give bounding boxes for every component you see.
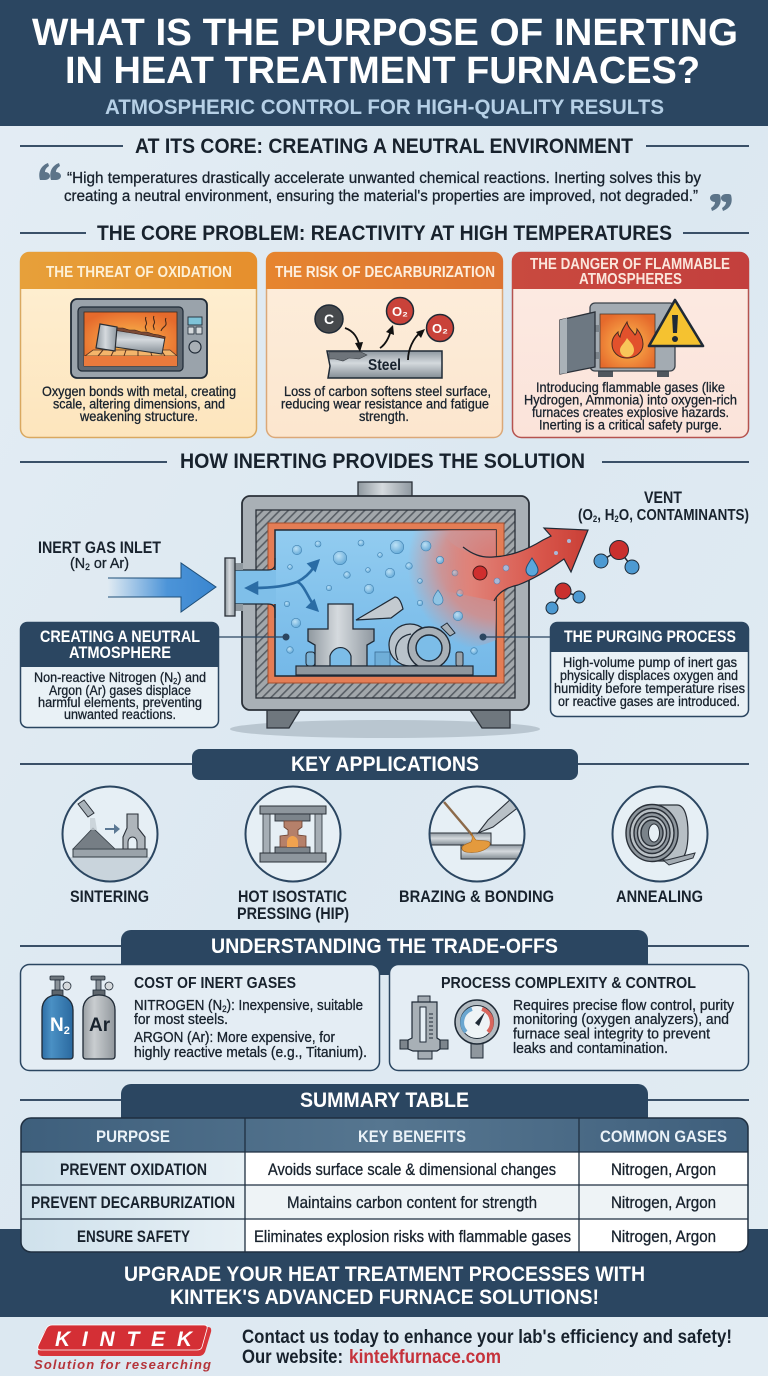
panel text	[441, 975, 735, 1057]
quote block: creating a neutral environment, ensuring the material's properties are improved, not degraded.”	[64, 188, 698, 205]
inlet label: (N	[70, 555, 86, 572]
vent label: 2	[593, 514, 597, 524]
card text: Introducing flammable gases (like	[536, 380, 725, 395]
card text: weakening structure.	[79, 409, 198, 424]
red contaminated gas cloud	[411, 530, 496, 646]
icon: powder sintering	[60, 786, 160, 887]
logo: kintek: Solution for researching	[34, 1357, 211, 1372]
icon: gas cylinders: N	[50, 1015, 64, 1036]
application: sintering	[60, 786, 160, 906]
vent label: , H	[597, 507, 614, 524]
title: IN HEAT TREATMENT FURNACES?	[65, 50, 700, 92]
row: prevent oxidation: Nitrogen, Argon	[611, 1161, 716, 1179]
summary table	[21, 1118, 748, 1252]
contact text: kintekfurnace.com	[349, 1347, 501, 1368]
inlet label: 2	[85, 562, 90, 572]
callout: creating a neutral atmosphere: Argon (Ar) gases displace	[49, 683, 191, 698]
icon: gas cylinders	[42, 976, 115, 1059]
blue flow arrows	[247, 561, 318, 610]
card text: strength.	[359, 409, 409, 424]
table header	[96, 1127, 727, 1146]
heading: at its core: AT ITS CORE: CREATING A NEUTRAL ENVIRONMENT	[135, 134, 633, 158]
row: ensure safety: Eliminates explosion risks with flammable gases	[254, 1228, 571, 1246]
subtitle: ATMOSPHERIC CONTROL FOR HIGH-QUALITY RESULTS	[105, 95, 664, 119]
card text: reducing wear resistance and fatigue	[281, 396, 489, 412]
icon: brazing torch	[425, 786, 526, 882]
call to action band	[0, 1229, 768, 1317]
panel text: Requires precise flow control, purity	[513, 998, 735, 1014]
card text: Hydrogen, Ammonia) into oxygen-rich	[524, 392, 737, 408]
shadow under furnace	[230, 720, 540, 738]
row: prevent decarburization: Maintains carbon content for strength	[287, 1194, 537, 1212]
row: ensure safety	[77, 1228, 716, 1246]
card text: Loss of carbon softens steel surface,	[284, 384, 491, 399]
card text: Oxygen bonds with metal, creating	[42, 384, 236, 399]
label: PRESSING (HIP)	[237, 905, 349, 923]
panel text: furnace seal integrity to prevent	[513, 1026, 710, 1042]
callout: the purging process: humidity before temperature rises	[554, 681, 745, 696]
callout: the purging process: THE PURGING PROCESS	[564, 627, 736, 646]
quote block: “High temperatures drastically accelerate unwanted chemical reactions. Inerting solves this by	[67, 170, 701, 187]
inlet label	[38, 538, 162, 572]
panel: danger of flammable atmospheres	[512, 252, 749, 438]
gas bubbles	[284, 540, 477, 654]
logo: kintek: KINTEK	[55, 1328, 194, 1351]
card text	[281, 384, 491, 424]
row: ensure safety: ENSURE SAFETY	[77, 1228, 190, 1246]
panel text: 2	[222, 1004, 227, 1014]
icon: flow meter	[400, 996, 448, 1059]
table header: PURPOSE	[96, 1127, 170, 1146]
card text: furnaces creates explosive hazards.	[532, 405, 729, 420]
icon: gas cylinders: Ar	[89, 1015, 111, 1036]
inlet arrow edge	[108, 563, 216, 612]
card text: Inerting is a critical safety purge.	[539, 418, 722, 432]
icon: carbon leaving steel: C	[324, 311, 334, 327]
contact text	[242, 1327, 732, 1368]
icon: opening quote mark	[39, 163, 61, 180]
vent label: O, CONTAMINANTS)	[619, 507, 749, 524]
panel text: monitoring (oxygen analyzers), and	[513, 1012, 729, 1028]
title	[32, 12, 738, 92]
icon: carbon leaving steel: Steel	[368, 357, 401, 374]
row: prevent oxidation	[60, 1161, 716, 1179]
molecules leaving vent	[546, 540, 639, 614]
vent label: VENT	[644, 488, 683, 507]
label	[237, 888, 349, 923]
section: understanding the trade-offs	[20, 930, 749, 1070]
callout: creating a neutral atmosphere: CREATING A NEUTRAL	[40, 627, 200, 646]
furnace diagram	[20, 482, 749, 738]
icon: isostatic press	[246, 786, 340, 882]
callout: creating a neutral atmosphere: unwanted reactions.	[64, 707, 176, 722]
card text	[524, 380, 737, 432]
row: prevent decarburization: PREVENT DECARBURIZATION	[31, 1194, 235, 1212]
contact text: Our website:	[242, 1347, 343, 1368]
card heading: THE DANGER OF FLAMMABLE	[530, 256, 730, 273]
inlet arrow	[108, 563, 216, 612]
section: understanding the trade-offs: UNDERSTANDING THE TRADE-OFFS	[211, 935, 558, 958]
vent label: (O	[578, 507, 595, 524]
icon: closing quote mark	[710, 194, 732, 211]
callout: creating a neutral atmosphere: ) and	[177, 670, 206, 685]
title: WHAT IS THE PURPOSE OF INERTING	[32, 12, 738, 54]
card heading: THE RISK OF DECARBURIZATION	[275, 264, 495, 281]
row: prevent decarburization: Nitrogen, Argon	[611, 1194, 716, 1212]
heading: core problem: THE CORE PROBLEM: REACTIVITY AT HIGH TEMPERATURES	[97, 221, 672, 245]
call to action band: UPGRADE YOUR HEAT TREATMENT PROCESSES WITH	[124, 1263, 645, 1286]
card text: scale, altering dimensions, and	[53, 396, 225, 412]
logo: kintek	[34, 1325, 211, 1372]
section: summary table: SUMMARY TABLE	[300, 1089, 469, 1112]
row: prevent oxidation: PREVENT OXIDATION	[60, 1161, 207, 1179]
row: ensure safety: Nitrogen, Argon	[611, 1228, 716, 1246]
refractory lining	[268, 523, 504, 683]
panel text: leaks and contamination.	[513, 1041, 668, 1057]
panel text: COST OF INERT GASES	[134, 975, 296, 992]
panel text: PROCESS COMPLEXITY & CONTROL	[441, 975, 696, 992]
callout: the purging process	[480, 622, 749, 716]
section: summary table	[20, 1084, 749, 1252]
icon: carbon leaving steel: O₂	[432, 321, 448, 336]
furnace legs	[267, 710, 510, 728]
red arrow body	[445, 528, 588, 601]
application: brazing and bonding	[399, 786, 554, 906]
card heading: THE THREAT OF OXIDATION	[46, 264, 232, 281]
label: SINTERING	[70, 888, 149, 906]
card heading	[530, 256, 730, 288]
panel text: NITROGEN (N	[134, 998, 232, 1014]
panel: risk of decarburization	[266, 252, 503, 438]
panel: process complexity and control	[390, 964, 748, 1070]
heading: key applications: KEY APPLICATIONS	[291, 753, 479, 776]
card text	[42, 384, 236, 424]
chamber interior	[225, 530, 496, 676]
callout: creating a neutral atmosphere: ATMOSPHERE	[69, 643, 171, 662]
card heading: ATMOSPHERES	[579, 271, 682, 288]
callout: creating a neutral atmosphere: 2	[173, 677, 178, 686]
icon: gas cylinders: 2	[64, 1025, 70, 1037]
callout: the purging process: physically displaces oxygen and	[560, 668, 738, 683]
vent label: 2	[614, 514, 619, 524]
callout: creating a neutral atmosphere: Non-reactive Nitrogen (N	[34, 670, 183, 685]
icon: oven with oxidising metal	[71, 299, 207, 378]
callout: the purging process: High-volume pump of inert gas	[563, 655, 737, 670]
quote block	[39, 163, 732, 211]
panel: threat of oxidation	[20, 252, 257, 438]
icon: metal coil	[612, 786, 708, 882]
call to action band: KINTEK'S ADVANCED FURNACE SOLUTIONS!	[170, 1286, 599, 1309]
row: prevent oxidation: Avoids surface scale & dimensional changes	[268, 1161, 556, 1179]
callout: creating a neutral atmosphere: harmful elements, preventing	[38, 695, 202, 710]
arrow outline	[463, 528, 588, 601]
icon: carbon leaving steel: O₂	[392, 304, 408, 319]
panel: cost of inert gases	[20, 964, 380, 1070]
heading: key applications	[20, 749, 749, 780]
label: HOT ISOSTATIC	[238, 888, 347, 906]
panel text: ARGON (Ar): More expensive, for	[134, 1030, 335, 1046]
icon: open furnace with flame and warning	[560, 300, 703, 377]
panel text	[134, 975, 367, 1061]
panel text: highly reactive metals (e.g., Titanium).	[134, 1045, 367, 1061]
inlet label: INERT GAS INLET	[38, 538, 162, 557]
insulation hatch	[256, 510, 515, 698]
metal workpieces	[296, 597, 473, 675]
callout: the purging process: or reactive gases are introduced.	[558, 694, 740, 709]
top vent stub	[358, 482, 412, 497]
inlet label: or Ar)	[90, 555, 129, 572]
contaminant particles in arrow	[433, 539, 571, 605]
panel text: for most steels.	[134, 1012, 228, 1028]
panel text: ): Inexpensive, suitable	[227, 998, 363, 1014]
icon: pressure gauge	[455, 1000, 499, 1058]
icon: carbon leaving steel	[315, 298, 454, 378]
heading: how inerting provides the solution: HOW INERTING PROVIDES THE SOLUTION	[180, 450, 585, 473]
furnace shell	[242, 496, 529, 710]
application: annealing	[612, 786, 708, 906]
callout: creating a neutral atmosphere	[20, 622, 290, 728]
vent label	[578, 488, 749, 524]
label: ANNEALING	[616, 888, 703, 906]
application: hot isostatic pressing	[237, 786, 349, 923]
table header: COMMON GASES	[600, 1127, 727, 1146]
table header: KEY BENEFITS	[358, 1127, 466, 1146]
label: BRAZING & BONDING	[399, 888, 554, 906]
header band	[0, 0, 768, 126]
row: prevent decarburization	[31, 1194, 716, 1212]
inlet flange and pipe	[225, 558, 276, 618]
